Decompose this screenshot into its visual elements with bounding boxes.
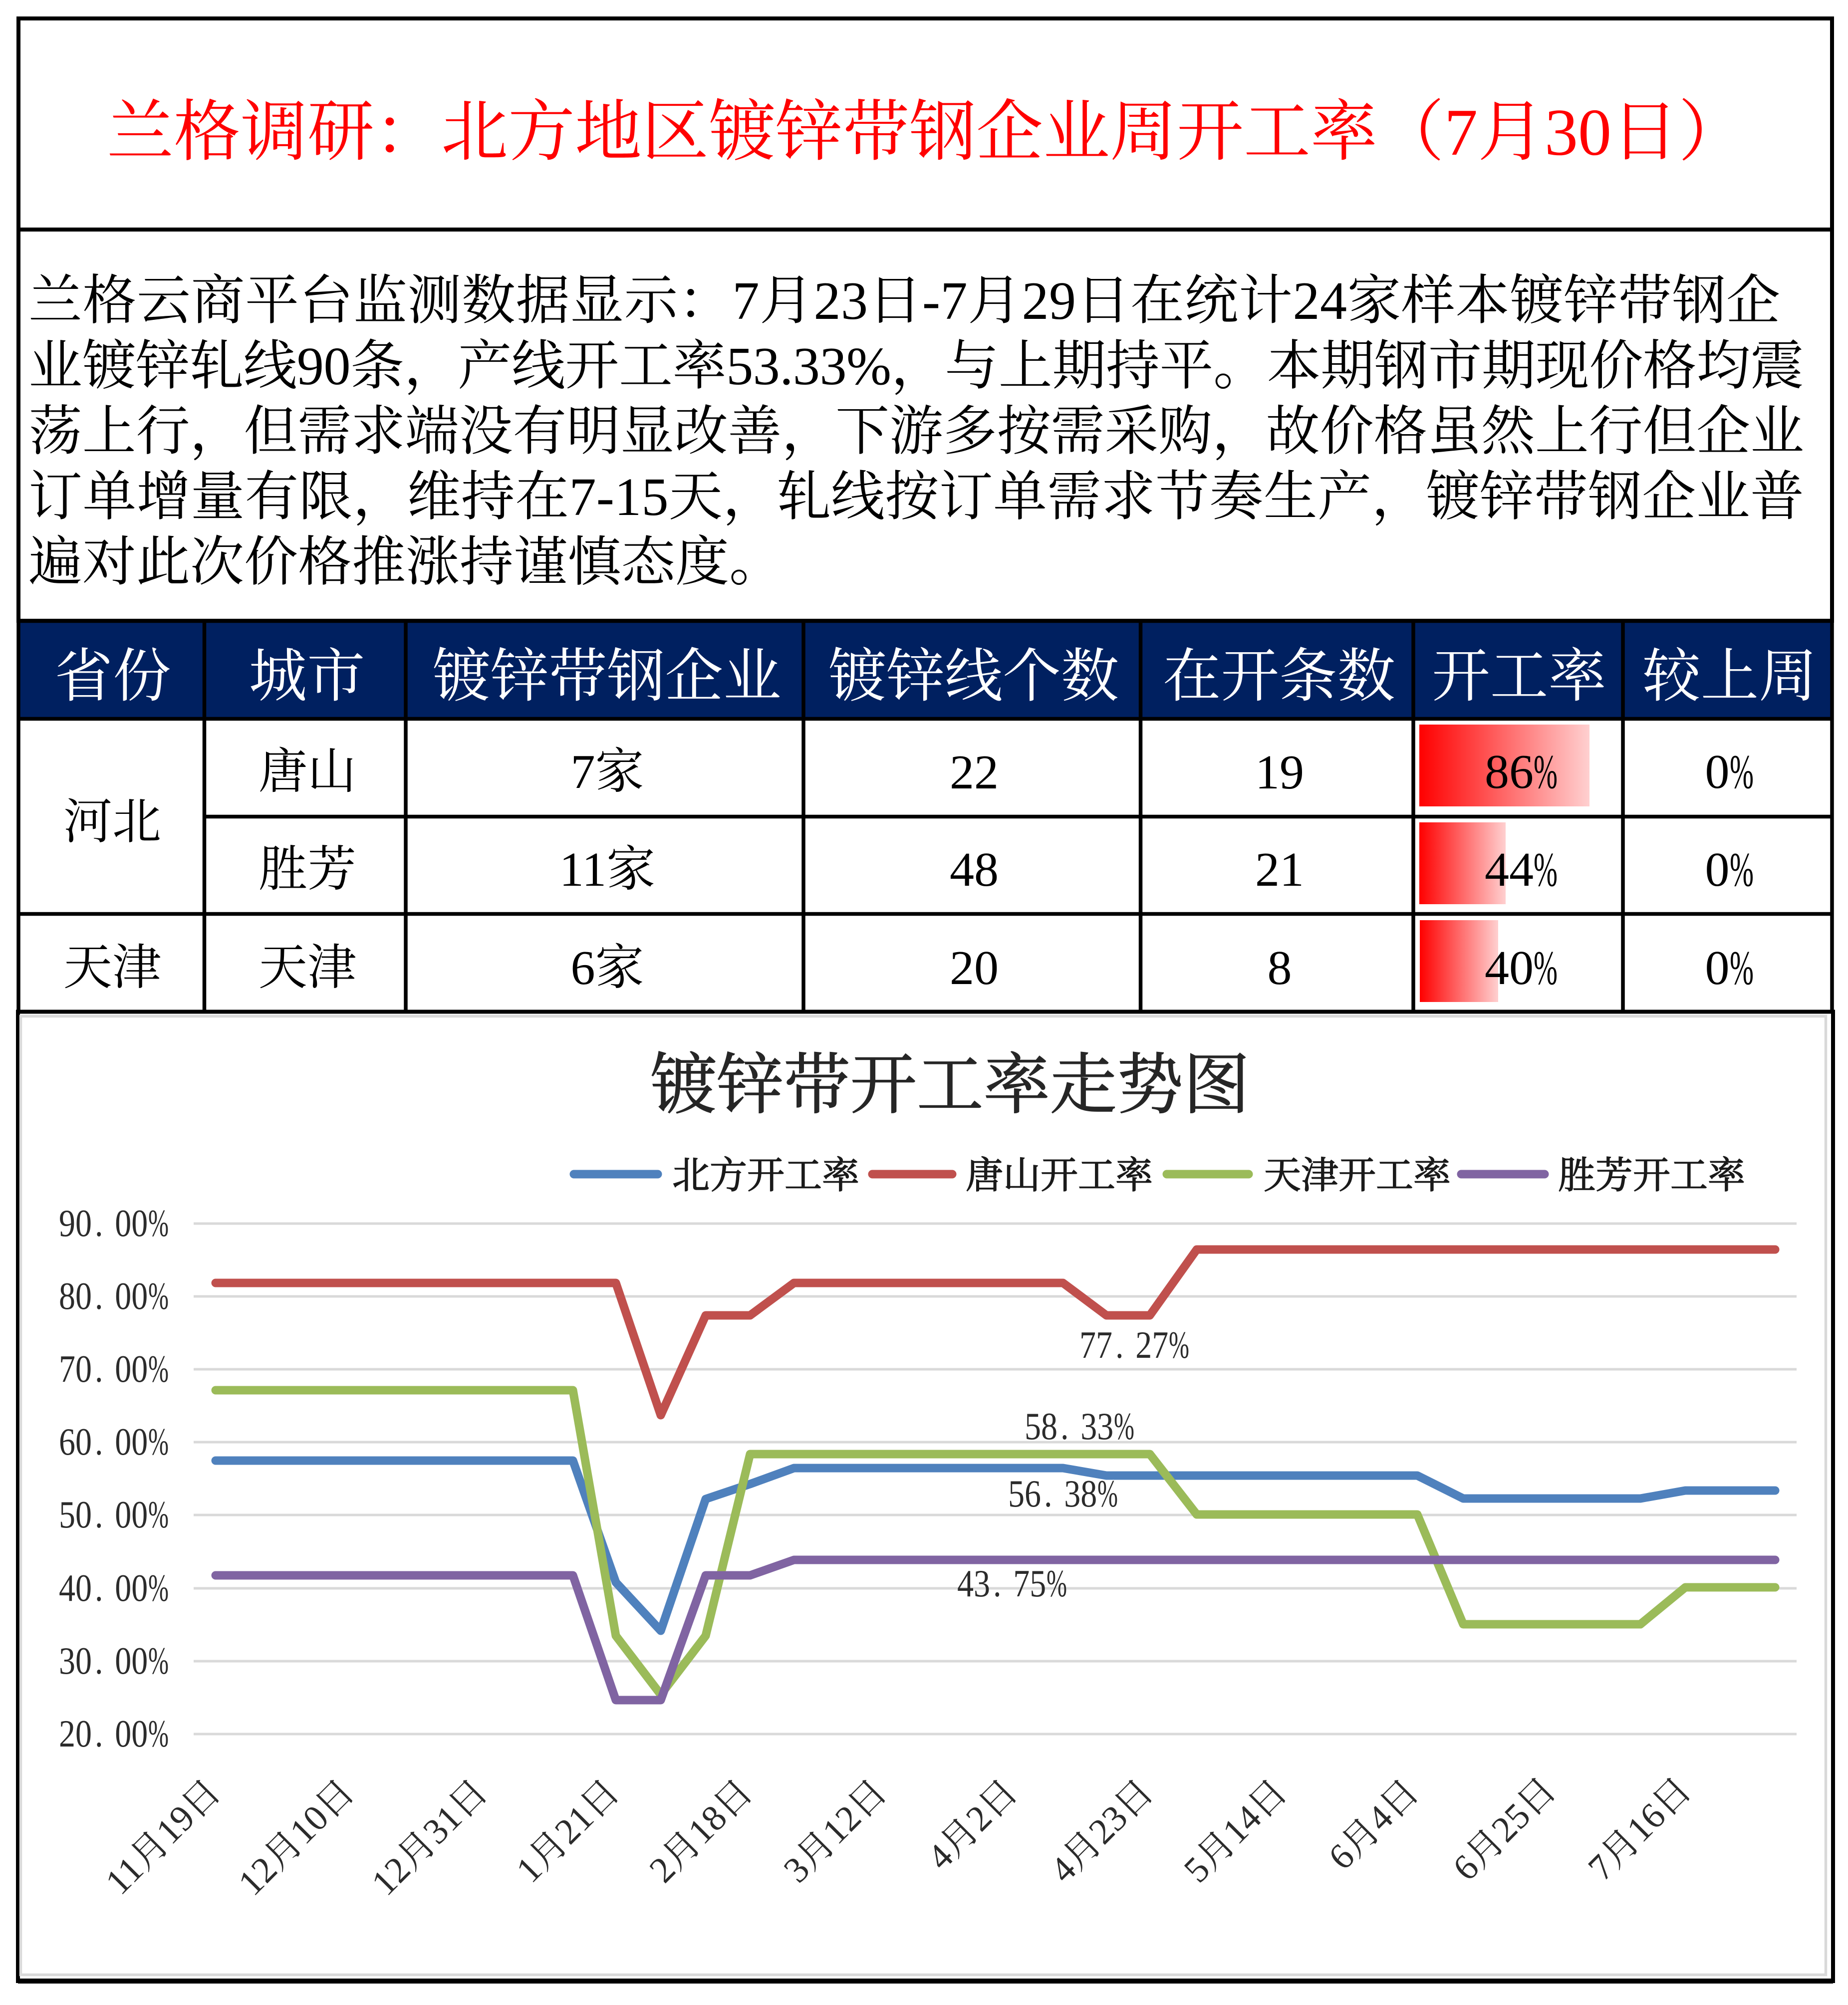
y axis labels: % (148, 1420, 169, 1463)
panel: summary paragraph: 订单增量有限，维持在7-15天，轧线按订单需求节奏生产，镀锌带钢企业普 (28, 468, 1804, 527)
data labels: 33 (1080, 1405, 1113, 1448)
x axis labels: 11月19日 (97, 1771, 228, 1902)
row: 胜芳 (259, 843, 1754, 897)
row: 河北 唐山: 22 (950, 746, 999, 799)
y axis labels: 90 (59, 1202, 92, 1245)
x axis labels: 4月2日 (919, 1771, 1025, 1877)
y axis labels: 00 (115, 1712, 148, 1755)
utilisation data bars (1419, 725, 1589, 1002)
row: 河北 唐山: 0 (1705, 745, 1730, 799)
row: 河北 唐山: % (1730, 745, 1754, 799)
legend: 北方开工率 (672, 1155, 859, 1197)
table header row: 镀锌线个数 (828, 645, 1119, 709)
panel: title (18, 18, 1832, 230)
row: 胜芳: 48 (950, 843, 999, 897)
y axis labels: . (95, 1493, 103, 1536)
data labels: % (1097, 1472, 1118, 1515)
y axis labels: . (95, 1639, 103, 1682)
y axis labels: 00 (115, 1493, 148, 1536)
row: 河北 唐山: 7家 (570, 745, 644, 799)
x axis labels: 6月25日 (1445, 1769, 1564, 1888)
y axis labels: % (148, 1347, 169, 1390)
y axis labels: 40 (59, 1566, 92, 1609)
row: 天津 (63, 941, 1754, 995)
y axis labels: 20 (59, 1712, 92, 1755)
row: 河北 唐山: % (1534, 745, 1558, 799)
row: 河北 唐山 (63, 745, 1754, 849)
data labels: % (1169, 1323, 1189, 1366)
line: 天津开工率 (216, 1390, 1775, 1695)
row: 天津: 0 (1705, 941, 1730, 995)
x axis labels: 5月14日 (1176, 1771, 1295, 1890)
row: 天津: 8 (1268, 941, 1292, 995)
legend: 唐山开工率 (966, 1155, 1153, 1197)
y axis labels: % (148, 1493, 169, 1536)
data labels: 56 (1008, 1472, 1041, 1515)
data labels: % (1114, 1405, 1134, 1448)
y axis labels: . (95, 1274, 103, 1317)
y axis labels: . (95, 1202, 103, 1245)
table header row: 城市 (249, 645, 365, 709)
chart title: 镀锌带开工率走势图 (650, 1048, 1250, 1122)
y axis labels: . (95, 1712, 103, 1755)
y axis labels: . (95, 1566, 103, 1609)
y axis labels: % (148, 1712, 169, 1755)
y axis labels: % (148, 1566, 169, 1609)
row: 天津: % (1534, 941, 1558, 995)
x axis labels: 4月23日 (1042, 1771, 1161, 1890)
panel: summary paragraph (18, 230, 1832, 621)
table header row: 较上周 (1642, 645, 1817, 709)
table header row: 镀锌带钢企业 (432, 645, 782, 709)
line: 胜芳开工率 (216, 1560, 1775, 1700)
x axis labels: 12月10日 (231, 1771, 362, 1903)
y axis labels: % (148, 1202, 169, 1245)
data labels: 75 (1013, 1562, 1046, 1605)
y axis labels: % (148, 1639, 169, 1682)
x axis labels (97, 1769, 1699, 1903)
y axis labels: 80 (59, 1274, 92, 1317)
y axis labels: 00 (115, 1347, 148, 1390)
table header row: 开工率 (1432, 645, 1606, 709)
data labels: . (1115, 1323, 1123, 1366)
data labels: . (993, 1562, 1001, 1605)
row: 天津: 6家 (570, 941, 644, 995)
table header row (18, 621, 1832, 719)
y axis labels: 60 (59, 1420, 92, 1463)
row: 河北 唐山: 河北 (63, 795, 161, 849)
row: 河北 唐山: 19 (1255, 746, 1304, 799)
y axis labels: 00 (115, 1566, 148, 1609)
data labels: 27 (1135, 1323, 1168, 1366)
data labels: 43 (957, 1562, 990, 1605)
y axis labels (59, 1202, 169, 1755)
y axis labels: . (95, 1347, 103, 1390)
heading: report title: 兰格调研：北方地区镀锌带钢企业周开工率（7月30日） (107, 95, 1745, 169)
row: 胜芳: 21 (1255, 843, 1304, 897)
panel: summary paragraph: 遍对此次价格推涨持谨慎态度。 (28, 533, 783, 592)
row: 胜芳: 11家 (559, 843, 655, 897)
x axis labels: 1月21日 (508, 1771, 627, 1890)
x axis labels: 12月31日 (364, 1771, 495, 1903)
row: 天津: 20 (950, 941, 999, 995)
x axis labels: 6月4日 (1320, 1771, 1426, 1877)
y axis labels: 30 (59, 1639, 92, 1682)
data labels: . (1060, 1405, 1068, 1448)
panel: data table (18, 621, 1832, 1011)
y axis labels: 00 (115, 1274, 148, 1317)
y axis labels: 00 (115, 1639, 148, 1682)
legend: 胜芳开工率 (1558, 1155, 1745, 1197)
y axis labels: % (148, 1274, 169, 1317)
y axis labels: 00 (115, 1202, 148, 1245)
line: 唐山开工率 (216, 1250, 1775, 1415)
data labels: 77 (1079, 1323, 1112, 1366)
row: 河北 唐山: 86 (1485, 745, 1534, 799)
row: 天津: 天津 (259, 941, 356, 995)
panel: summary paragraph: 兰格云商平台监测数据显示：7月23日-7月29日在统计24家样本镀锌带钢企 (28, 271, 1780, 331)
legend: 天津开工率 (1264, 1155, 1451, 1197)
panel: summary paragraph: 业镀锌轧线90条，产线开工率53.33%，与上期持平。本期钢市期现价格均震 (28, 337, 1804, 396)
data labels (957, 1323, 1189, 1605)
y axis labels: 50 (59, 1493, 92, 1536)
panel: trend chart (18, 1012, 1833, 1981)
row: 胜芳: 0 (1705, 843, 1730, 897)
data labels: 38 (1064, 1472, 1097, 1515)
data labels: % (1047, 1562, 1067, 1605)
row: 天津: 天津 (63, 941, 161, 995)
row: 胜芳: % (1534, 843, 1558, 897)
y axis labels: 70 (59, 1347, 92, 1390)
legend (574, 1155, 1745, 1197)
row: 天津: 40 (1485, 941, 1534, 995)
row: 河北 唐山: 唐山 (259, 745, 356, 799)
y axis labels: . (95, 1420, 103, 1463)
x axis labels: 3月12日 (776, 1771, 894, 1890)
y axis labels: 00 (115, 1420, 148, 1463)
x axis labels: 7月16日 (1580, 1769, 1699, 1888)
row: 胜芳: 44 (1485, 843, 1534, 897)
data labels: . (1044, 1472, 1052, 1515)
row: 胜芳: 胜芳 (259, 843, 356, 897)
line: 北方开工率 (216, 1461, 1775, 1631)
table header row: 省份 (55, 645, 171, 709)
row: 天津: % (1730, 941, 1754, 995)
row: 胜芳: % (1730, 843, 1754, 897)
panel: summary paragraph: 荡上行，但需求端没有明显改善，下游多按需采购，故价格虽然上行但企业 (28, 402, 1804, 462)
table header row: 在开条数 (1163, 645, 1395, 709)
x axis labels: 2月18日 (641, 1771, 760, 1890)
data labels: 58 (1025, 1405, 1057, 1448)
